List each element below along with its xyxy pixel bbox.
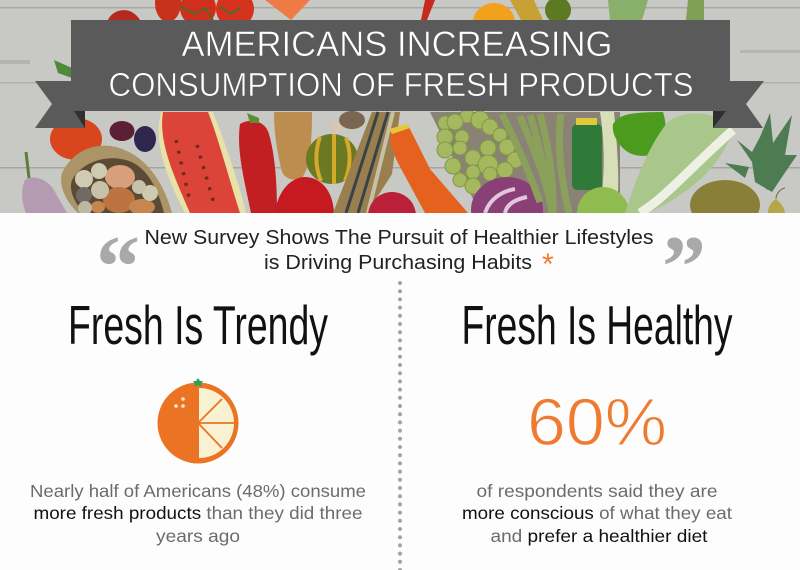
red bell pepper — [275, 177, 334, 213]
green bell pepper — [613, 112, 666, 156]
plum — [110, 121, 134, 141]
hero photo: wooden table with fresh produce — [0, 0, 800, 213]
baguette — [274, 112, 312, 180]
body text: more conscious of what they eat — [462, 503, 732, 523]
asparagus — [502, 114, 569, 213]
title line 1: AMERICANS INCREASING — [182, 25, 612, 64]
left quote mark: “ — [96, 219, 140, 316]
green apple — [577, 187, 628, 213]
dark gap behind greens — [430, 112, 620, 213]
grapes — [437, 109, 523, 194]
watermelon seeds — [176, 140, 215, 207]
left panel: fresh is trendy — [30, 294, 366, 546]
heading: Fresh Is Trendy — [68, 294, 328, 356]
tomato — [50, 118, 102, 160]
big stat: 60% — [527, 385, 667, 460]
squash — [306, 134, 358, 184]
orange asterisk: * — [542, 248, 554, 281]
orange juice bottle — [390, 125, 468, 213]
body text: of respondents said they are — [476, 481, 718, 501]
striped cloth — [333, 112, 400, 213]
pear — [768, 199, 785, 213]
mushrooms — [330, 122, 346, 132]
leek — [600, 112, 618, 192]
pomegranate — [368, 192, 416, 213]
body text — [462, 481, 732, 546]
title line 2: CONSUMPTION OF FRESH PRODUCTS — [108, 66, 694, 103]
watermelon — [159, 112, 246, 213]
vertical dotted divider — [398, 283, 402, 570]
radicchio — [471, 177, 543, 213]
green juice bottle — [572, 124, 602, 190]
ribbon fold shadows — [74, 111, 85, 128]
body text: and prefer a healthier diet — [490, 526, 708, 546]
subtitle line 2: is Driving Purchasing Habits — [264, 252, 532, 274]
tomatoes top — [155, 0, 181, 22]
right quote mark: ” — [662, 219, 706, 316]
body text: years ago — [156, 526, 240, 546]
subtitle line 1: New Survey Shows The Pursuit of Healthier Lifestyles — [144, 227, 654, 249]
red pepper long — [239, 121, 277, 213]
basket with eggs — [61, 146, 172, 213]
icon: orange — [158, 378, 238, 464]
right panel: fresh is healthy — [462, 294, 733, 546]
eggplant small — [134, 126, 156, 152]
pineapple — [690, 180, 760, 213]
napa cabbage — [625, 113, 733, 213]
subtitle with quotes — [96, 219, 706, 316]
body text: Nearly half of Americans (48%) consume — [30, 481, 366, 501]
ribbon right tail — [713, 81, 764, 128]
body text — [30, 481, 366, 546]
ribbon main band — [71, 20, 730, 111]
ribbon left tail — [35, 81, 85, 128]
purple eggplant — [22, 178, 67, 213]
body text: more fresh products than they did three — [34, 503, 362, 523]
title ribbon — [35, 20, 764, 128]
